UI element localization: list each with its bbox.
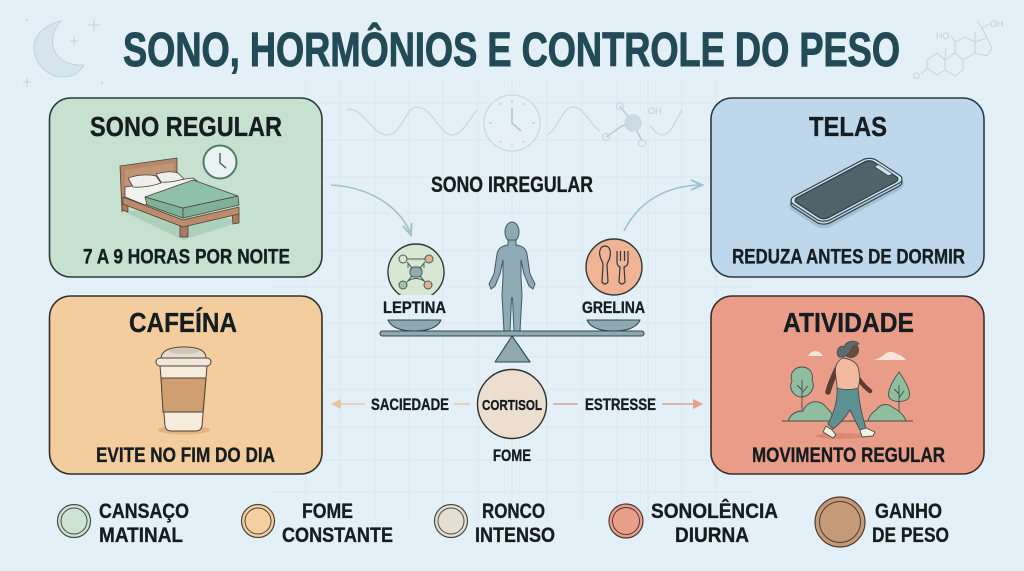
icon: steroid molecule: O [913, 71, 920, 81]
scale [380, 320, 644, 362]
heading: telas: TELAS [809, 111, 887, 142]
legend: ganho de peso: DE PESO [872, 523, 949, 547]
label: fome: FOME [493, 446, 531, 465]
icon: smartphone [787, 156, 906, 228]
icon: steroid molecule: OH [990, 19, 1004, 29]
legend: sonolência diurna [609, 498, 778, 547]
legend: cansaço matinal: CANSAÇO [99, 499, 189, 523]
icon: grelina spoon and fork [586, 239, 642, 295]
legend: fome constante: FOME [302, 499, 353, 523]
label: estresse: ESTRESSE [585, 395, 656, 414]
label: leptina: LEPTINA [383, 298, 446, 317]
legend: cansaço matinal: MATINAL [99, 523, 183, 547]
icon: human body [489, 222, 535, 331]
legend: fome constante [242, 499, 393, 547]
legend: ganho de peso: GANHO [875, 499, 942, 523]
icon: coffee cup [156, 347, 211, 434]
arrow: toward estresse [553, 399, 703, 409]
icon: leptina molecule [388, 244, 444, 300]
icon: walking person in park [782, 341, 913, 439]
icon: moon and stars [23, 19, 103, 87]
legend: ronco intenso: RONCO [482, 499, 545, 523]
icon: wall clock [204, 146, 236, 178]
icon: bed [120, 158, 240, 240]
panel: atividade [711, 296, 984, 474]
panel: sono regular [50, 98, 322, 277]
heading: sono regular: SONO REGULAR [90, 111, 282, 142]
heading: cafeína: CAFEÍNA [129, 307, 237, 338]
cortisol circle: CORTISOL [482, 397, 542, 414]
legend: ganho de peso [815, 497, 949, 547]
arrow: sono regular to leptina [331, 185, 412, 235]
label: grelina: GRELINA [582, 298, 645, 317]
heading: atividade: ATIVIDADE [783, 307, 914, 338]
legend: ronco intenso: INTENSO [475, 523, 555, 547]
legend: fome constante: CONSTANTE [282, 523, 393, 547]
caption: 7 a 9 horas: 7 A 9 HORAS POR NOITE [83, 244, 290, 268]
background sine wave, clock and molecule [347, 95, 682, 151]
label: saciedade: SACIEDADE [371, 395, 449, 414]
legend: ronco intenso [434, 499, 555, 547]
legend: sonolência diurna: SONOLÊNCIA [651, 498, 778, 523]
legend: cansaço matinal [58, 499, 189, 547]
caption: movimento regular: MOVIMENTO REGULAR [752, 443, 945, 467]
cortisol circle [478, 370, 546, 438]
background sine wave, clock and molecule: OH [648, 106, 662, 116]
legend: sonolência diurna: DIURNA [675, 523, 749, 547]
icon: steroid molecule: HO [936, 31, 950, 41]
heading: sono irregular: SONO IRREGULAR [431, 172, 593, 197]
arrow: grelina to telas [624, 180, 702, 231]
icon: steroid molecule [913, 19, 1004, 81]
caption: evite no fim do dia: EVITE NO FIM DO DIA [96, 443, 275, 467]
arrow: toward saciedade [331, 399, 470, 409]
panel: cafeína [50, 296, 322, 474]
panel: telas [711, 98, 984, 277]
caption: reduza antes de dormir: REDUZA ANTES DE DORMIR [732, 244, 965, 268]
